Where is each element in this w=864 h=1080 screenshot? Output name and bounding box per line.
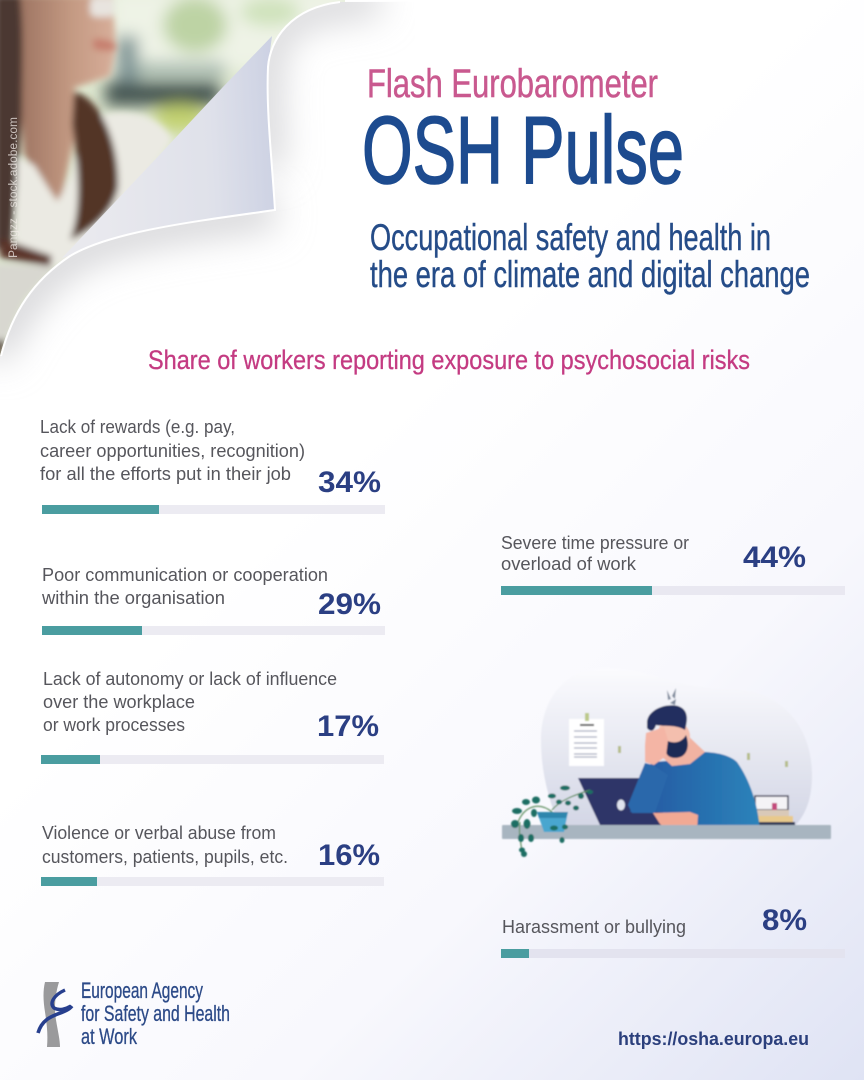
backdrop blob — [541, 668, 812, 826]
stat: severe time pressure 44%: 44% — [743, 541, 806, 574]
title: Flash Eurobarometer — [367, 62, 658, 106]
title: OSH Pulse — [362, 97, 684, 204]
paper shading along curl — [0, 0, 380, 356]
stat: harassment or bullying 8%: 8% — [762, 904, 807, 937]
sweat drops — [667, 688, 676, 705]
illustration: stressed man at laptop — [502, 668, 831, 857]
table — [502, 825, 831, 839]
pins — [618, 746, 788, 767]
plant — [511, 786, 593, 857]
to-do note — [569, 713, 604, 766]
logo wordmark: for Safety and Health — [81, 1001, 230, 1026]
folded flap back — [62, 36, 275, 258]
stat: poor communication 29%: 29% — [318, 588, 381, 621]
subtitle — [370, 217, 810, 295]
stat: lack of rewards 34%: for all the efforts put in their job — [40, 464, 291, 484]
hair left — [0, 0, 22, 250]
logo wordmark: at Work — [81, 1024, 138, 1049]
stat: lack of rewards 34%: career opportunities, recognition) — [40, 441, 305, 461]
curl highlight — [1, 2, 340, 356]
logo mark — [38, 982, 72, 1047]
section heading: Share of workers reporting exposure to psychosocial risks — [148, 345, 750, 375]
stat: severe time pressure 44% — [501, 533, 845, 595]
stat: harassment or bullying 8% — [501, 904, 845, 958]
stat: poor communication 29% — [41, 565, 385, 635]
stat: lack of autonomy 17%: over the workplace — [43, 692, 195, 712]
face and neck — [18, 0, 116, 205]
stat: severe time pressure 44%: overload of work — [501, 554, 637, 574]
laptop — [578, 778, 668, 825]
stat: harassment or bullying 8%: Harassment or bullying — [502, 917, 686, 937]
stat: violence or verbal abuse 16% — [41, 823, 384, 886]
hair right — [70, 92, 118, 240]
stat: lack of rewards 34%: Lack of rewards (e.g. pay, — [40, 417, 235, 437]
stat: poor communication 29%: within the organisation — [41, 588, 225, 608]
books — [755, 796, 795, 825]
logo wordmark: European Agency — [81, 978, 203, 1003]
logo wordmark — [81, 978, 230, 1049]
stat: poor communication 29%: Poor communication or cooperation — [42, 565, 328, 585]
stat: violence or verbal abuse 16%: Violence or verbal abuse from — [42, 823, 276, 843]
stat: violence or verbal abuse 16%: customers, patients, pupils, etc. — [42, 847, 288, 867]
EU-OSHA logo — [38, 978, 230, 1049]
stat: lack of rewards 34%: 34% — [318, 466, 381, 499]
stat: lack of autonomy 17% — [41, 669, 384, 764]
shirt — [15, 113, 172, 266]
stat: lack of rewards 34% — [40, 417, 385, 514]
stat: violence or verbal abuse 16%: 16% — [318, 839, 380, 872]
title — [362, 62, 684, 204]
photo credit: Pangzz - stock.adobe.com — [8, 117, 20, 258]
man — [628, 705, 760, 830]
website url: https://osha.europa.eu — [618, 1028, 809, 1049]
photo: woman with glasses looking away — [0, 0, 350, 375]
stat: lack of autonomy 17%: Lack of autonomy or lack of influence — [43, 669, 337, 689]
stat: lack of autonomy 17%: 17% — [317, 710, 379, 743]
stat: lack of autonomy 17%: or work processes — [43, 715, 185, 735]
stat: severe time pressure 44%: Severe time pressure or — [501, 533, 689, 553]
